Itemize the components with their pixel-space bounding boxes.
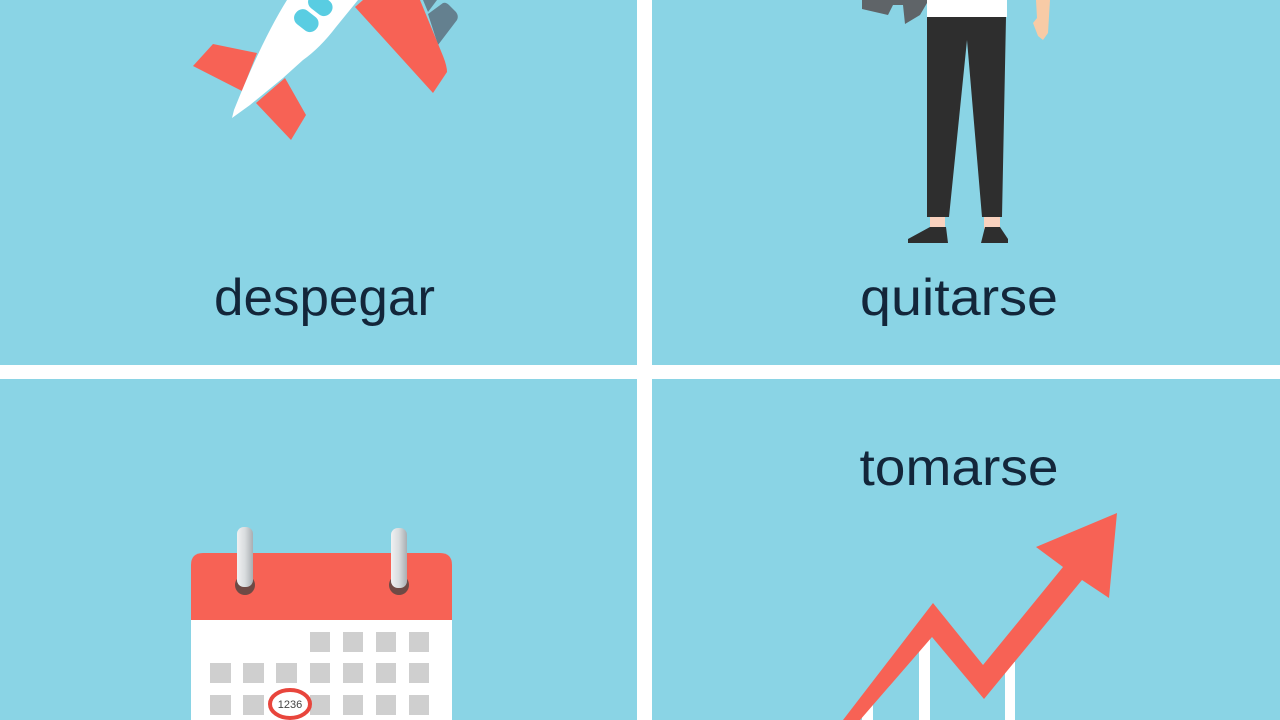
icon: airplane	[193, 0, 458, 140]
label: despegar: despegar	[214, 269, 435, 327]
panel: despegar	[0, 0, 637, 365]
shoes	[908, 227, 1008, 243]
plane wing right	[355, 0, 447, 93]
label: quitarse: quitarse	[860, 269, 1058, 327]
arm	[1033, 0, 1050, 40]
calendar page	[191, 610, 452, 720]
circled date	[270, 690, 310, 718]
plane windows	[291, 0, 336, 35]
socks	[930, 217, 1000, 229]
panel: tomarse	[652, 379, 1280, 720]
label: tomarse: tomarse	[860, 439, 1058, 497]
plane engine	[423, 0, 458, 45]
plane fuselage	[232, 0, 358, 118]
plane tail fin lower	[256, 78, 306, 140]
panel: quitarse	[652, 0, 1280, 365]
calendar day cells	[210, 632, 429, 715]
bars	[862, 638, 1015, 720]
icon: person removing jacket	[862, 0, 1050, 243]
calendar header	[191, 553, 452, 620]
arrow	[843, 513, 1117, 720]
trousers	[927, 17, 1006, 217]
shirt	[927, 0, 1007, 17]
panel: calendario	[0, 379, 637, 720]
plane tail fin left	[193, 44, 257, 91]
calendar rings	[235, 527, 409, 595]
chart: rising bars and arrow	[843, 513, 1117, 720]
jacket held in hand	[862, 0, 927, 24]
circled date: 1236	[278, 699, 302, 711]
icon: calendar	[191, 527, 452, 720]
